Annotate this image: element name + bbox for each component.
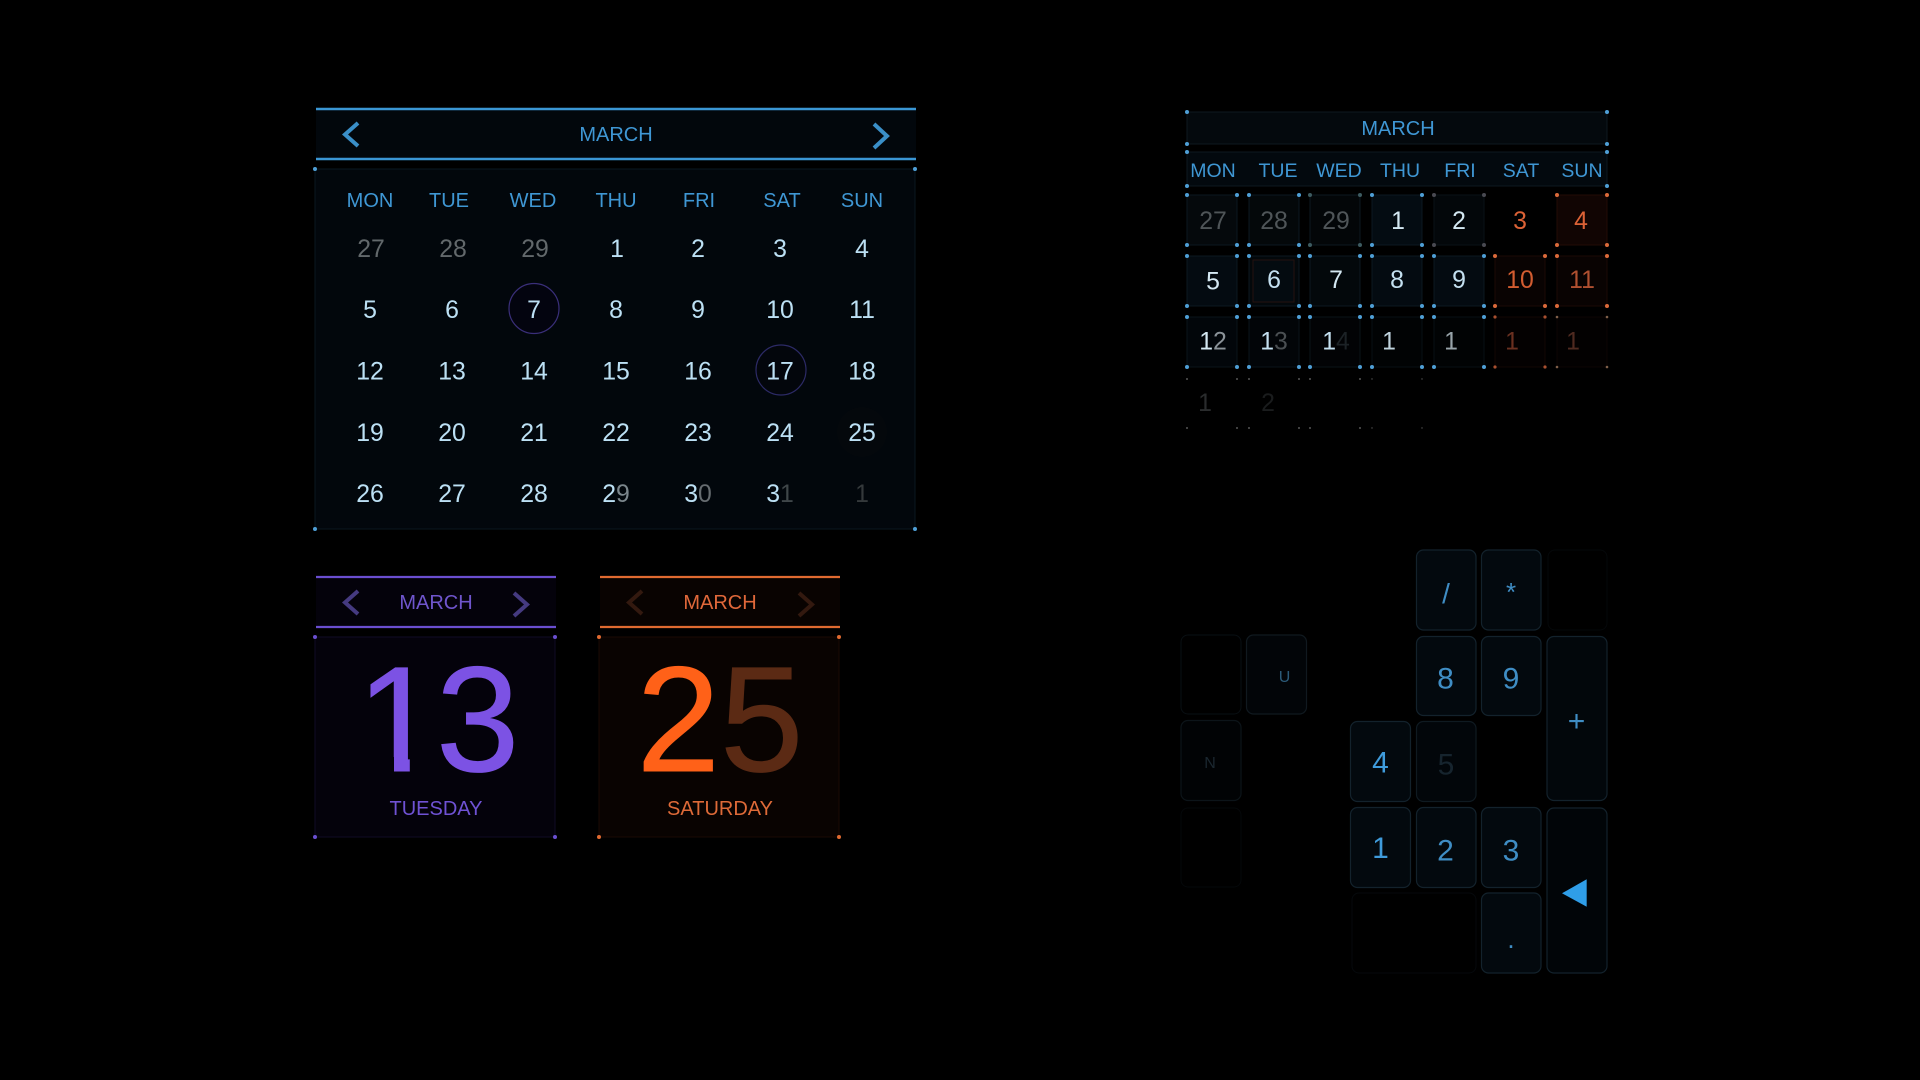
dates week 2: 11 xyxy=(849,297,875,324)
panel: small calendar xyxy=(1185,110,1609,429)
dates week 3: 16 xyxy=(684,358,712,386)
key: 9 xyxy=(1482,636,1541,716)
key: 2 xyxy=(1416,808,1476,888)
big date 25: 25 xyxy=(637,635,803,803)
week 1 cells: 4 xyxy=(1574,208,1588,235)
weekday labels: SAT xyxy=(763,190,801,212)
dates week 4: 21 xyxy=(520,420,548,447)
panel: purple day card xyxy=(313,577,557,839)
header xyxy=(600,577,840,627)
dates week 4: 19 xyxy=(356,420,384,447)
dates week 1: 28 xyxy=(439,236,467,263)
week 2 cells: 10 xyxy=(1506,267,1534,294)
header: MARCH xyxy=(683,592,757,614)
week 4 cells fading: 1 xyxy=(1198,390,1212,417)
weekday bar: SAT xyxy=(1503,160,1539,182)
dates week 5: 1 xyxy=(855,481,869,508)
big date 13: 1 xyxy=(356,635,440,803)
dates week 2: 10 xyxy=(766,297,794,324)
dates week 3: 12 xyxy=(356,358,384,386)
big date 13 xyxy=(352,635,519,803)
key: U xyxy=(1246,635,1306,714)
week 4 cells fading: 2 xyxy=(1261,390,1275,417)
dates week 1: 4 xyxy=(855,236,869,263)
faint ring: 25 xyxy=(837,407,887,457)
dates week 2: 8 xyxy=(609,297,623,324)
key: blank top right xyxy=(1548,550,1607,630)
week 2 cells: 7 xyxy=(1329,267,1343,294)
body xyxy=(597,635,841,839)
dates week 2: 9 xyxy=(691,297,705,324)
weekday: TUESDAY xyxy=(390,798,482,820)
week 2 cells: 9 xyxy=(1452,267,1466,294)
dates week 5 xyxy=(356,481,869,508)
key: 5: 5 xyxy=(1438,748,1454,782)
dates week 3 xyxy=(356,358,876,386)
dates week 4: 22 xyxy=(602,420,630,447)
key: 3 xyxy=(1482,808,1541,888)
weekday labels: MON xyxy=(347,190,393,212)
header xyxy=(316,577,556,627)
dates week 2: 5 xyxy=(363,297,377,324)
key: 1 xyxy=(1350,808,1410,888)
key: 4: 4 xyxy=(1372,746,1389,780)
dates week 1: 29 xyxy=(521,236,549,263)
weekday bar: MON xyxy=(1190,160,1236,182)
week 2 cells: 8 xyxy=(1390,267,1404,294)
key: divide xyxy=(1416,550,1476,630)
week 1 cells: 29 xyxy=(1322,208,1350,235)
week 1 cells: 28 xyxy=(1260,208,1288,235)
key: 2: 2 xyxy=(1437,834,1454,868)
dates week 4: 23 xyxy=(684,420,712,447)
selected date ring: 7 xyxy=(509,284,559,334)
key: enter xyxy=(1547,808,1607,973)
dates week 5: 26 xyxy=(356,481,384,508)
key: 4 xyxy=(1350,722,1410,802)
weekday bar: FRI xyxy=(1444,160,1476,182)
dates week 2: 7 xyxy=(527,297,541,324)
key: faint blank xyxy=(1181,635,1241,714)
weekday labels xyxy=(347,190,883,212)
month header: MARCH xyxy=(1361,118,1435,140)
week 1 cells: 1 xyxy=(1391,208,1405,235)
week 3 cells: 1 xyxy=(1505,328,1519,356)
dates week 3: 17 xyxy=(766,358,794,386)
week 2 cells xyxy=(1185,254,1609,308)
key: N: N xyxy=(1204,755,1216,772)
header: MARCH xyxy=(399,592,473,614)
key: faint blank lower xyxy=(1181,808,1241,887)
weekday: SATURDAY xyxy=(667,798,773,820)
week 3 cells: 1 xyxy=(1444,328,1458,356)
weekday bar: THU xyxy=(1380,160,1420,182)
panel: numeric keypad xyxy=(1181,550,1607,973)
dates week 5: 30 xyxy=(684,481,712,508)
dates week 3: 15 xyxy=(602,358,630,386)
key: plus xyxy=(1547,636,1607,800)
weekday bar: TUE xyxy=(1258,160,1298,182)
key: N xyxy=(1181,720,1241,800)
week 3 cells xyxy=(1185,315,1608,369)
key: divide: / xyxy=(1442,578,1450,609)
header bar: MARCH xyxy=(579,124,653,146)
week 4 cells fading xyxy=(1186,378,1423,429)
dates week 5: 29 xyxy=(602,481,630,508)
dates week 4: 24 xyxy=(766,420,794,447)
key: multiply: * xyxy=(1506,577,1516,607)
week 3 cells: 12 xyxy=(1199,328,1227,356)
key: zero blank xyxy=(1352,893,1476,973)
month header xyxy=(1185,110,1609,146)
big date 13: 3 xyxy=(436,635,519,803)
week 2 cells: 6 xyxy=(1267,267,1281,294)
week 2 cells: 5 xyxy=(1206,268,1220,296)
dates week 2: 6 xyxy=(445,297,459,324)
week 1 cells xyxy=(1185,193,1609,247)
selected date ring: 17 xyxy=(756,345,806,395)
week 3 cells: 1 xyxy=(1566,328,1580,356)
dates week 3: 14 xyxy=(520,358,548,386)
key: 1: 1 xyxy=(1372,832,1389,865)
dates week 5: 28 xyxy=(520,481,548,508)
key: multiply xyxy=(1482,550,1541,630)
key: 3: 3 xyxy=(1503,834,1519,868)
week 2 cells: 11 xyxy=(1569,267,1595,294)
calendar body panel xyxy=(313,167,917,531)
body xyxy=(313,635,557,839)
week 3 cells: 14 xyxy=(1322,328,1350,356)
week 1 cells: 2 xyxy=(1452,208,1466,235)
key: 5 xyxy=(1416,722,1476,802)
week 3 cells: 13 xyxy=(1260,328,1288,356)
dates week 3: 13 xyxy=(438,358,466,386)
key: dot: . xyxy=(1507,924,1515,954)
key: U: U xyxy=(1279,669,1290,686)
key: 8 xyxy=(1416,636,1476,716)
dates week 5: 27 xyxy=(438,481,466,508)
key: dot xyxy=(1482,893,1541,973)
panel: orange day card xyxy=(597,577,841,839)
weekday bar xyxy=(1185,150,1609,188)
dates week 1: 3 xyxy=(773,236,787,263)
weekday bar: SUN xyxy=(1561,160,1603,182)
dates week 3: 18 xyxy=(848,358,876,386)
key: plus: + xyxy=(1568,705,1585,738)
weekday bar: WED xyxy=(1316,160,1362,182)
weekday labels: FRI xyxy=(683,190,715,212)
dates week 4: 25 xyxy=(848,420,876,447)
dates week 4 xyxy=(356,420,876,447)
dates week 1 xyxy=(357,236,869,263)
panel: main calendar xyxy=(313,109,917,531)
dates week 5: 31 xyxy=(766,481,794,508)
week 1 cells: 27 xyxy=(1199,208,1227,235)
weekday labels: TUE xyxy=(429,190,469,212)
dates week 1: 2 xyxy=(691,236,705,263)
key: 8: 8 xyxy=(1437,662,1454,696)
weekday labels: SUN xyxy=(841,190,883,212)
dates week 2 xyxy=(363,297,875,324)
weekday labels: WED xyxy=(510,190,556,212)
dates week 4: 20 xyxy=(438,420,466,447)
key: 9: 9 xyxy=(1503,662,1519,696)
weekday labels: THU xyxy=(595,190,637,212)
dates week 1: 27 xyxy=(357,236,385,263)
week 3 cells: 1 xyxy=(1382,328,1396,356)
header bar xyxy=(316,109,916,159)
dates week 1: 1 xyxy=(610,236,624,263)
week 1 cells: 3 xyxy=(1513,208,1527,235)
